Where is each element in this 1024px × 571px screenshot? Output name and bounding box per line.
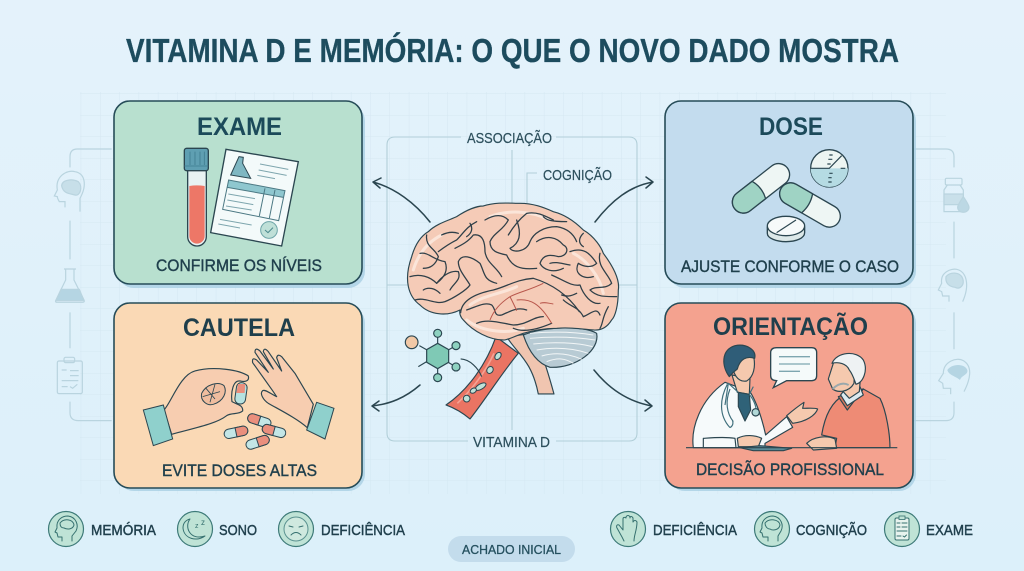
legend right bbox=[610, 512, 973, 546]
legend: memória: MEMÓRIA bbox=[91, 522, 156, 539]
legend: sono: z bbox=[201, 518, 205, 527]
legend: cognição bbox=[754, 512, 867, 546]
icon: speech bubble bbox=[771, 348, 817, 388]
panel: cautela bbox=[114, 303, 365, 491]
vitamin d molecule bbox=[405, 329, 482, 382]
icon: capsule right bbox=[776, 179, 844, 231]
icon: tablet bbox=[767, 216, 805, 242]
legend: memória bbox=[48, 512, 156, 546]
left decorative icon column bbox=[54, 149, 112, 421]
right decorative icon column bbox=[910, 149, 970, 421]
cerebellum bbox=[523, 328, 597, 367]
caption: EVITE DOSES ALTAS bbox=[162, 461, 317, 480]
label: associação: ASSOCIAÇÃO bbox=[467, 130, 552, 147]
icon: flask bbox=[56, 269, 84, 302]
icon: left hand holding capsule bbox=[143, 369, 249, 446]
legend: sono: SONO bbox=[219, 522, 257, 539]
icon: test tube bbox=[184, 148, 208, 246]
arrow: to orientação bbox=[594, 370, 652, 411]
icon: capsule left bbox=[728, 159, 794, 218]
icon: head with brain bbox=[54, 171, 84, 212]
caption: AJUSTE CONFORME O CASO bbox=[681, 257, 899, 276]
legend: sono bbox=[178, 512, 257, 546]
label: vitamina d: VITAMINA D bbox=[473, 435, 550, 451]
legend: exame: EXAME bbox=[926, 522, 973, 539]
title: VITAMINA D E MEMÓRIA: O QUE O NOVO DADO MOSTRA bbox=[126, 32, 899, 69]
panel: dose bbox=[665, 101, 916, 288]
heading: ORIENTAÇÃO bbox=[713, 311, 868, 341]
brain highlight bbox=[413, 212, 603, 331]
badge: achado inicial: ACHADO INICIAL bbox=[462, 542, 561, 557]
brain folds bbox=[410, 213, 617, 330]
consultation table bbox=[686, 446, 897, 449]
brain veins bbox=[490, 283, 553, 323]
central frame with labels bbox=[387, 130, 637, 451]
legend: deficiência hand bbox=[610, 512, 737, 546]
blood vessel with vitamin capsules bbox=[446, 337, 518, 419]
legend: exame bbox=[884, 512, 973, 546]
caption: DECISÃO PROFISSIONAL bbox=[696, 460, 884, 479]
arrow: to exame bbox=[373, 178, 430, 222]
cerebrum bbox=[408, 203, 619, 340]
icon: lab report bbox=[211, 149, 298, 246]
badge: achado inicial bbox=[448, 536, 575, 562]
brain illustration bbox=[405, 203, 619, 419]
legend: deficiência hand: DEFICIÊNCIA bbox=[653, 522, 737, 539]
icon: dose gauge bbox=[811, 150, 848, 187]
illustration: doctor bbox=[693, 345, 818, 451]
brain stem bbox=[507, 333, 554, 394]
icon: clipboard bbox=[57, 357, 82, 394]
heading: EXAME bbox=[197, 113, 282, 141]
legend left bbox=[48, 512, 405, 546]
heading: DOSE bbox=[759, 113, 823, 141]
icon: head with brain bbox=[938, 269, 967, 302]
icon: supplement bottle bbox=[944, 178, 969, 212]
legend: deficiência bbox=[278, 512, 405, 546]
arrows from brain to panels bbox=[372, 177, 653, 411]
panel: orientação bbox=[665, 303, 916, 491]
arrow: to cautela bbox=[372, 385, 420, 411]
illustration: patient bbox=[807, 353, 890, 450]
legend: cognição: COGNIÇÃO bbox=[796, 522, 867, 539]
icon: scattered capsules bbox=[223, 413, 287, 450]
caption: CONFIRME OS NÍVEIS bbox=[156, 256, 322, 275]
legend: deficiência: DEFICIÊNCIA bbox=[321, 522, 405, 539]
panel: exame bbox=[114, 101, 365, 288]
arrow: to dose bbox=[595, 177, 653, 222]
heading: CAUTELA bbox=[183, 314, 295, 342]
icon: right hand stop gesture bbox=[252, 349, 334, 439]
label: cognição: COGNIÇÃO bbox=[543, 167, 612, 184]
icon: head with brain silhouette bbox=[939, 359, 970, 394]
legend: sono: z bbox=[195, 523, 199, 530]
